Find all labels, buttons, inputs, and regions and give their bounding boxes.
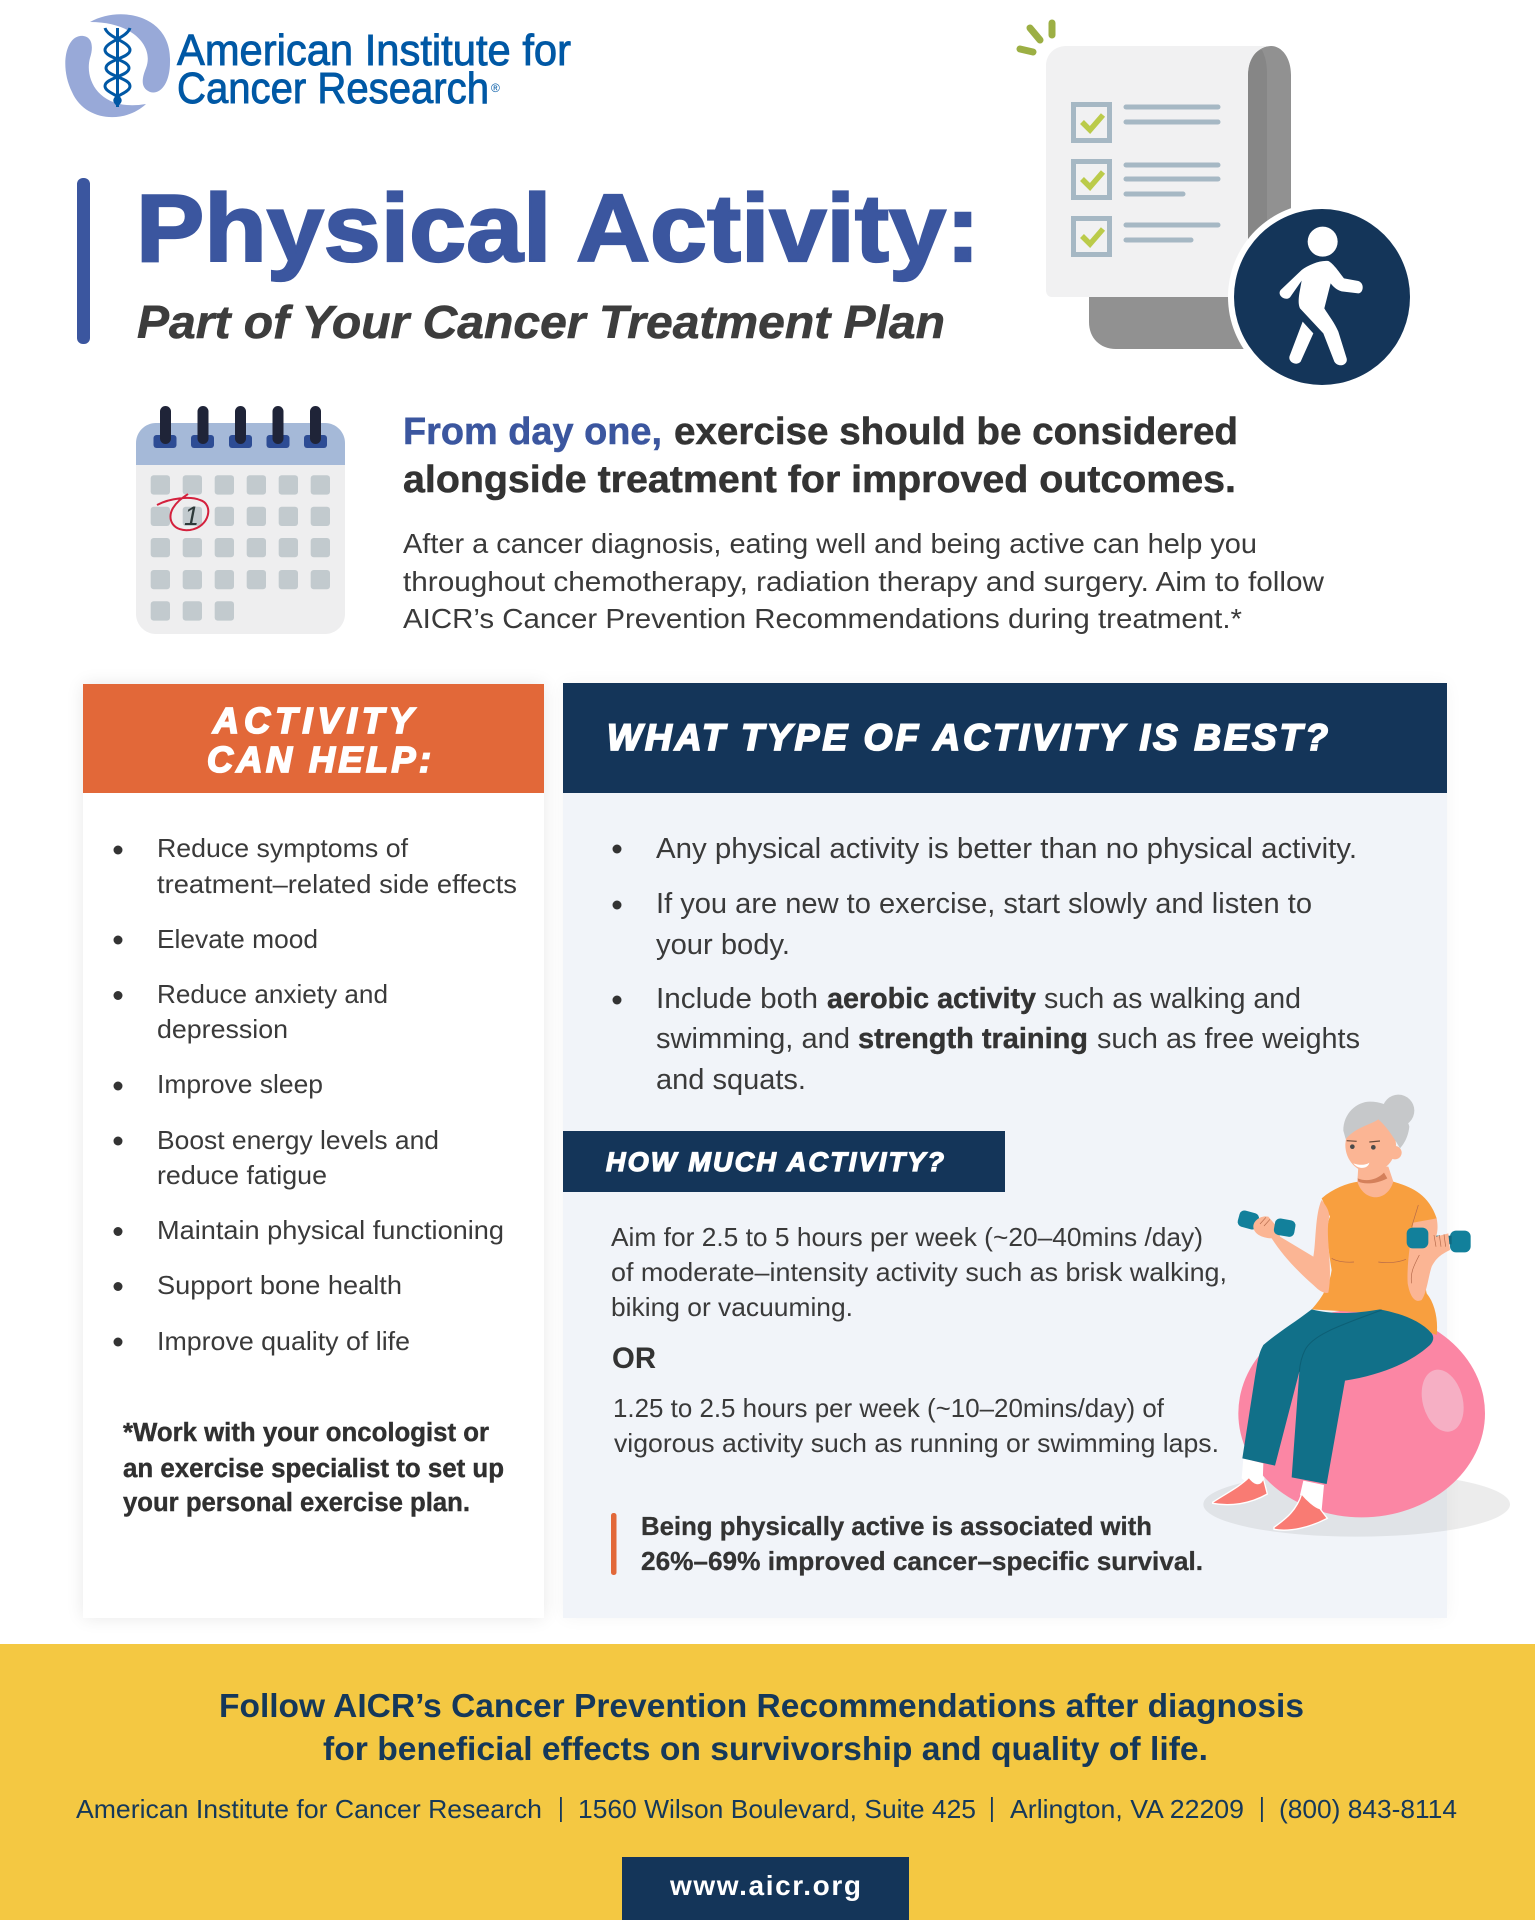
logo: American Institute for Cancer Research: American Institute for [177,26,571,75]
vigorous activity guidance [613,1393,1219,1458]
intro paragraph: AICR’s Cancer Prevention Recommendations during treatment.* [403,603,1242,634]
subheading: how much activity: HOW MUCH ACTIVITY? [606,1147,944,1177]
callout: survival statistic: 26%–69% improved cancer–specific survival. [641,1546,1203,1576]
intro heading: alongside treatment for improved outcomes. [403,459,1236,501]
benefits list: depression [157,1014,288,1044]
intro heading: exercise should be considered [674,411,1238,453]
contact line: American Institute for Cancer Research [76,1794,542,1824]
footer message [219,1687,1304,1767]
callout: survival statistic [611,1511,1203,1576]
title: Physical Activity: [136,175,980,282]
vigorous activity guidance: 1.25 to 2.5 hours per week (~10–20mins/day) of [613,1393,1165,1423]
illustration: older woman exercising on a ball with dumbbells [1203,1095,1510,1537]
activity type list: Any physical activity is better than no physical activity. [656,833,1357,865]
icon: checklist with walking person [1020,23,1416,391]
title accent bar [77,178,90,344]
activity type list: your body. [656,929,790,961]
intro paragraph: throughout chemotherapy, radiation therapy and surgery. Aim to follow [403,566,1325,597]
benefits list: Elevate mood [157,924,318,954]
contact line: Arlington, VA 22209 [1010,1794,1244,1824]
footer message: for beneficial effects on survivorship and quality of life. [323,1730,1208,1767]
benefits list: Reduce symptoms of [157,833,409,863]
vigorous activity guidance: vigorous activity such as running or swimming laps. [614,1428,1219,1458]
benefits list: treatment–related side effects [157,869,517,899]
subtitle: Part of Your Cancer Treatment Plan [137,296,945,348]
moderate activity guidance: Aim for 2.5 to 5 hours per week (~20–40mins /day) [611,1222,1203,1252]
oncologist note: *Work with your oncologist or [123,1419,489,1447]
benefits list: Maintain physical functioning [157,1215,504,1245]
website button [622,1857,909,1920]
oncologist note: your personal exercise plan. [123,1489,470,1517]
website button: www.aicr.org [669,1870,861,1901]
oncologist note [123,1419,504,1517]
contact line: 1560 Wilson Boulevard, Suite 425 [578,1794,976,1824]
benefits list: Support bone health [157,1270,402,1300]
subheading: how much activity [563,1131,1005,1192]
benefits list: Boost energy levels and [157,1125,439,1155]
panel heading: activity can help: ACTIVITY [212,700,416,741]
intro heading: From day one, [403,411,662,453]
or separator: OR [612,1342,656,1375]
logo: American Institute for Cancer Research: Cancer Research [177,64,489,113]
activity type list: strength training [858,1023,1088,1055]
benefits list: Improve quality of life [157,1326,410,1356]
activity type list: If you are new to exercise, start slowly and listen to [656,888,1312,920]
icon: calendar with day 1 circled [136,406,345,634]
panel heading: what type of activity [563,683,1447,793]
panel heading: activity can help: CAN HELP: [207,739,431,780]
benefits list: Reduce anxiety and [157,979,388,1009]
intro paragraph: After a cancer diagnosis, eating well and being active can help you [403,528,1257,559]
intro heading [403,411,1238,501]
panel heading: activity can help [83,684,544,793]
activity type list: swimming, and [656,1023,850,1055]
intro paragraph [403,528,1325,634]
panel: what type of activity is best [563,683,1447,1618]
benefits list: reduce fatigue [157,1160,327,1190]
callout: survival statistic: Being physically active is associated with [641,1511,1152,1541]
moderate activity guidance [611,1222,1227,1322]
benefits list: Improve sleep [157,1069,323,1099]
benefits list [114,833,517,1356]
activity type list: such as walking and [1044,983,1301,1015]
panel: activity can help [83,684,544,1618]
logo: American Institute for Cancer Research [65,14,571,117]
activity type list [612,833,1360,1096]
moderate activity guidance: of moderate–intensity activity such as brisk walking, [611,1257,1227,1287]
contact line [76,1794,1457,1824]
footer message: Follow AICR’s Cancer Prevention Recommendations after diagnosis [219,1687,1304,1724]
logo: American Institute for Cancer Research: ® [491,81,500,95]
oncologist note: an exercise specialist to set up [123,1455,504,1483]
activity type list: aerobic activity [827,983,1036,1015]
moderate activity guidance: biking or vacuuming. [611,1292,853,1322]
icon: calendar with day 1 circled: 1 [184,501,199,531]
activity type list: Include both [656,983,818,1015]
activity type list: such as free weights [1097,1023,1360,1055]
panel heading: what type of activity: WHAT TYPE OF ACTIVITY IS BEST? [607,717,1328,758]
activity type list: and squats. [656,1064,806,1096]
contact line: (800) 843-8114 [1279,1794,1457,1824]
footer band [0,1644,1535,1920]
